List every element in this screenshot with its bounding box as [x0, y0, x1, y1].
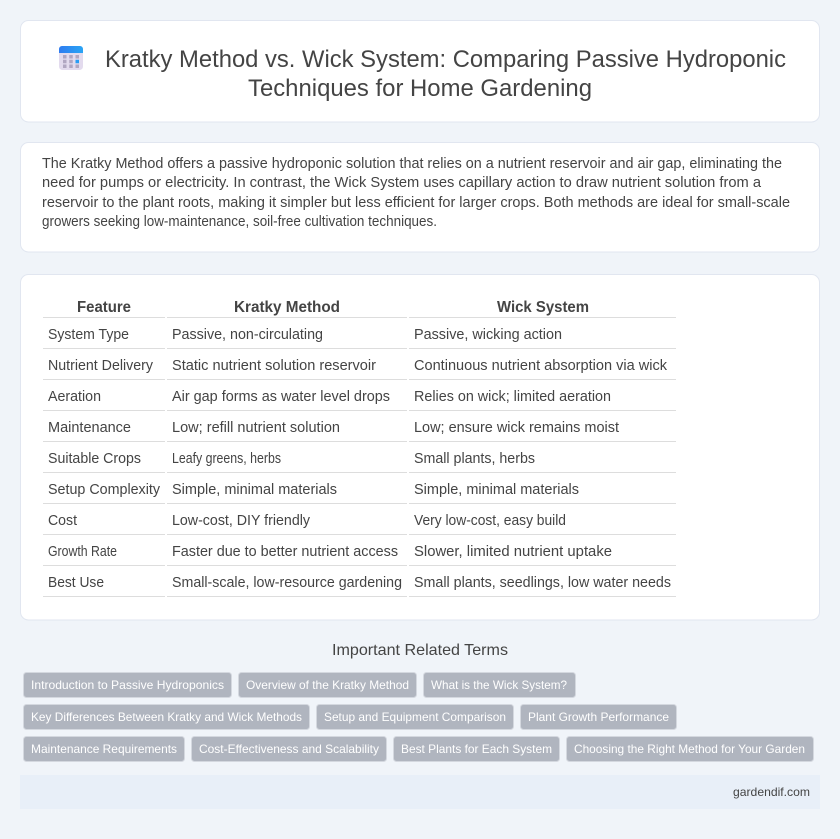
table row: nutrient delivery: Continuous nutrient absorption via wick — [414, 358, 668, 374]
related term tags: Choosing the Right Method for Your Garden — [574, 742, 805, 756]
table row: aeration: Air gap forms as water level drops — [172, 389, 390, 405]
comparison table panel — [20, 274, 820, 620]
table row: maintenance: Low; refill nutrient solution — [172, 420, 340, 436]
footer: gardendif.com — [733, 785, 810, 799]
table row: growth rate: Slower, limited nutrient uptake — [414, 544, 612, 560]
table row: aeration: Relies on wick; limited aeration — [414, 389, 611, 405]
table row: nutrient delivery: Static nutrient solution reservoir — [172, 358, 376, 374]
footer — [20, 775, 820, 809]
intro text — [42, 156, 790, 230]
table row: suitable crops — [48, 451, 535, 467]
table row: system type — [48, 327, 562, 343]
table row: maintenance: Low; ensure wick remains moist — [414, 420, 619, 436]
intro text: need for pumps or electricity. In contrast, the Wick System uses capillary action to draw nutrient solution from a — [42, 175, 761, 191]
table row: cost: Very low-cost, easy build — [414, 513, 566, 529]
table header — [77, 299, 589, 316]
table row: system type: Passive, non-circulating — [172, 327, 323, 343]
table row: growth rate — [48, 544, 612, 560]
table row: best use: Small plants, seedlings, low water needs — [414, 575, 671, 591]
related term tags: Cost-Effectiveness and Scalability — [199, 742, 379, 756]
title: Kratky Method vs. Wick System: Comparing Passive Hydroponic — [105, 46, 786, 73]
table header: Feature — [77, 299, 131, 316]
table row: maintenance: Maintenance — [48, 420, 131, 436]
intro panel — [20, 142, 820, 252]
header panel — [20, 20, 820, 122]
icon: calendar — [59, 46, 83, 70]
table row: aeration: Aeration — [48, 389, 101, 405]
table row: setup complexity: Simple, minimal materials — [414, 482, 579, 498]
title — [105, 46, 786, 102]
table row: system type: Passive, wicking action — [414, 327, 562, 343]
table row: best use — [48, 575, 671, 591]
table row: cost — [48, 513, 566, 529]
table row: setup complexity: Setup Complexity — [48, 482, 161, 498]
table row: maintenance — [48, 420, 619, 436]
table row: suitable crops: Suitable Crops — [48, 451, 141, 467]
table row: cost: Low-cost, DIY friendly — [172, 513, 311, 529]
table row: aeration — [48, 389, 611, 405]
related term tags: Best Plants for Each System — [401, 742, 552, 756]
table row: growth rate: Growth Rate — [48, 544, 117, 560]
related term tags: Plant Growth Performance — [528, 710, 669, 724]
table row: system type: System Type — [48, 327, 129, 343]
table row: cost: Cost — [48, 513, 77, 529]
table row: growth rate: Faster due to better nutrient access — [172, 544, 398, 560]
table header: Kratky Method — [234, 299, 340, 316]
table row: setup complexity: Simple, minimal materials — [172, 482, 337, 498]
related term tags: Overview of the Kratky Method — [246, 678, 409, 692]
related term tags: Introduction to Passive Hydroponics — [31, 678, 224, 692]
table row: setup complexity — [48, 482, 579, 498]
title: Techniques for Home Gardening — [248, 75, 592, 102]
table row: suitable crops: Small plants, herbs — [414, 451, 535, 467]
related term tags — [24, 672, 814, 762]
table row: best use: Small-scale, low-resource gardening — [172, 575, 402, 591]
related terms heading: Important Related Terms — [332, 642, 508, 659]
related term tags: Key Differences Between Kratky and Wick Methods — [31, 710, 302, 724]
table row: nutrient delivery — [48, 358, 668, 374]
intro text: The Kratky Method offers a passive hydroponic solution that relies on a nutrient reservoir and air gap, eliminating the — [42, 156, 782, 172]
table row: best use: Best Use — [48, 575, 104, 591]
table row: nutrient delivery: Nutrient Delivery — [48, 358, 154, 374]
intro text: reservoir to the plant roots, making it simpler but less efficient for larger crops. Both methods are ideal for small-scale — [42, 195, 790, 211]
intro text: growers seeking low-maintenance, soil-free cultivation techniques. — [42, 214, 437, 230]
table header: Wick System — [497, 299, 589, 316]
table row: suitable crops: Leafy greens, herbs — [172, 451, 281, 467]
related term tags: Setup and Equipment Comparison — [324, 710, 506, 724]
related term tags: What is the Wick System? — [431, 678, 567, 692]
related term tags: Maintenance Requirements — [31, 742, 177, 756]
